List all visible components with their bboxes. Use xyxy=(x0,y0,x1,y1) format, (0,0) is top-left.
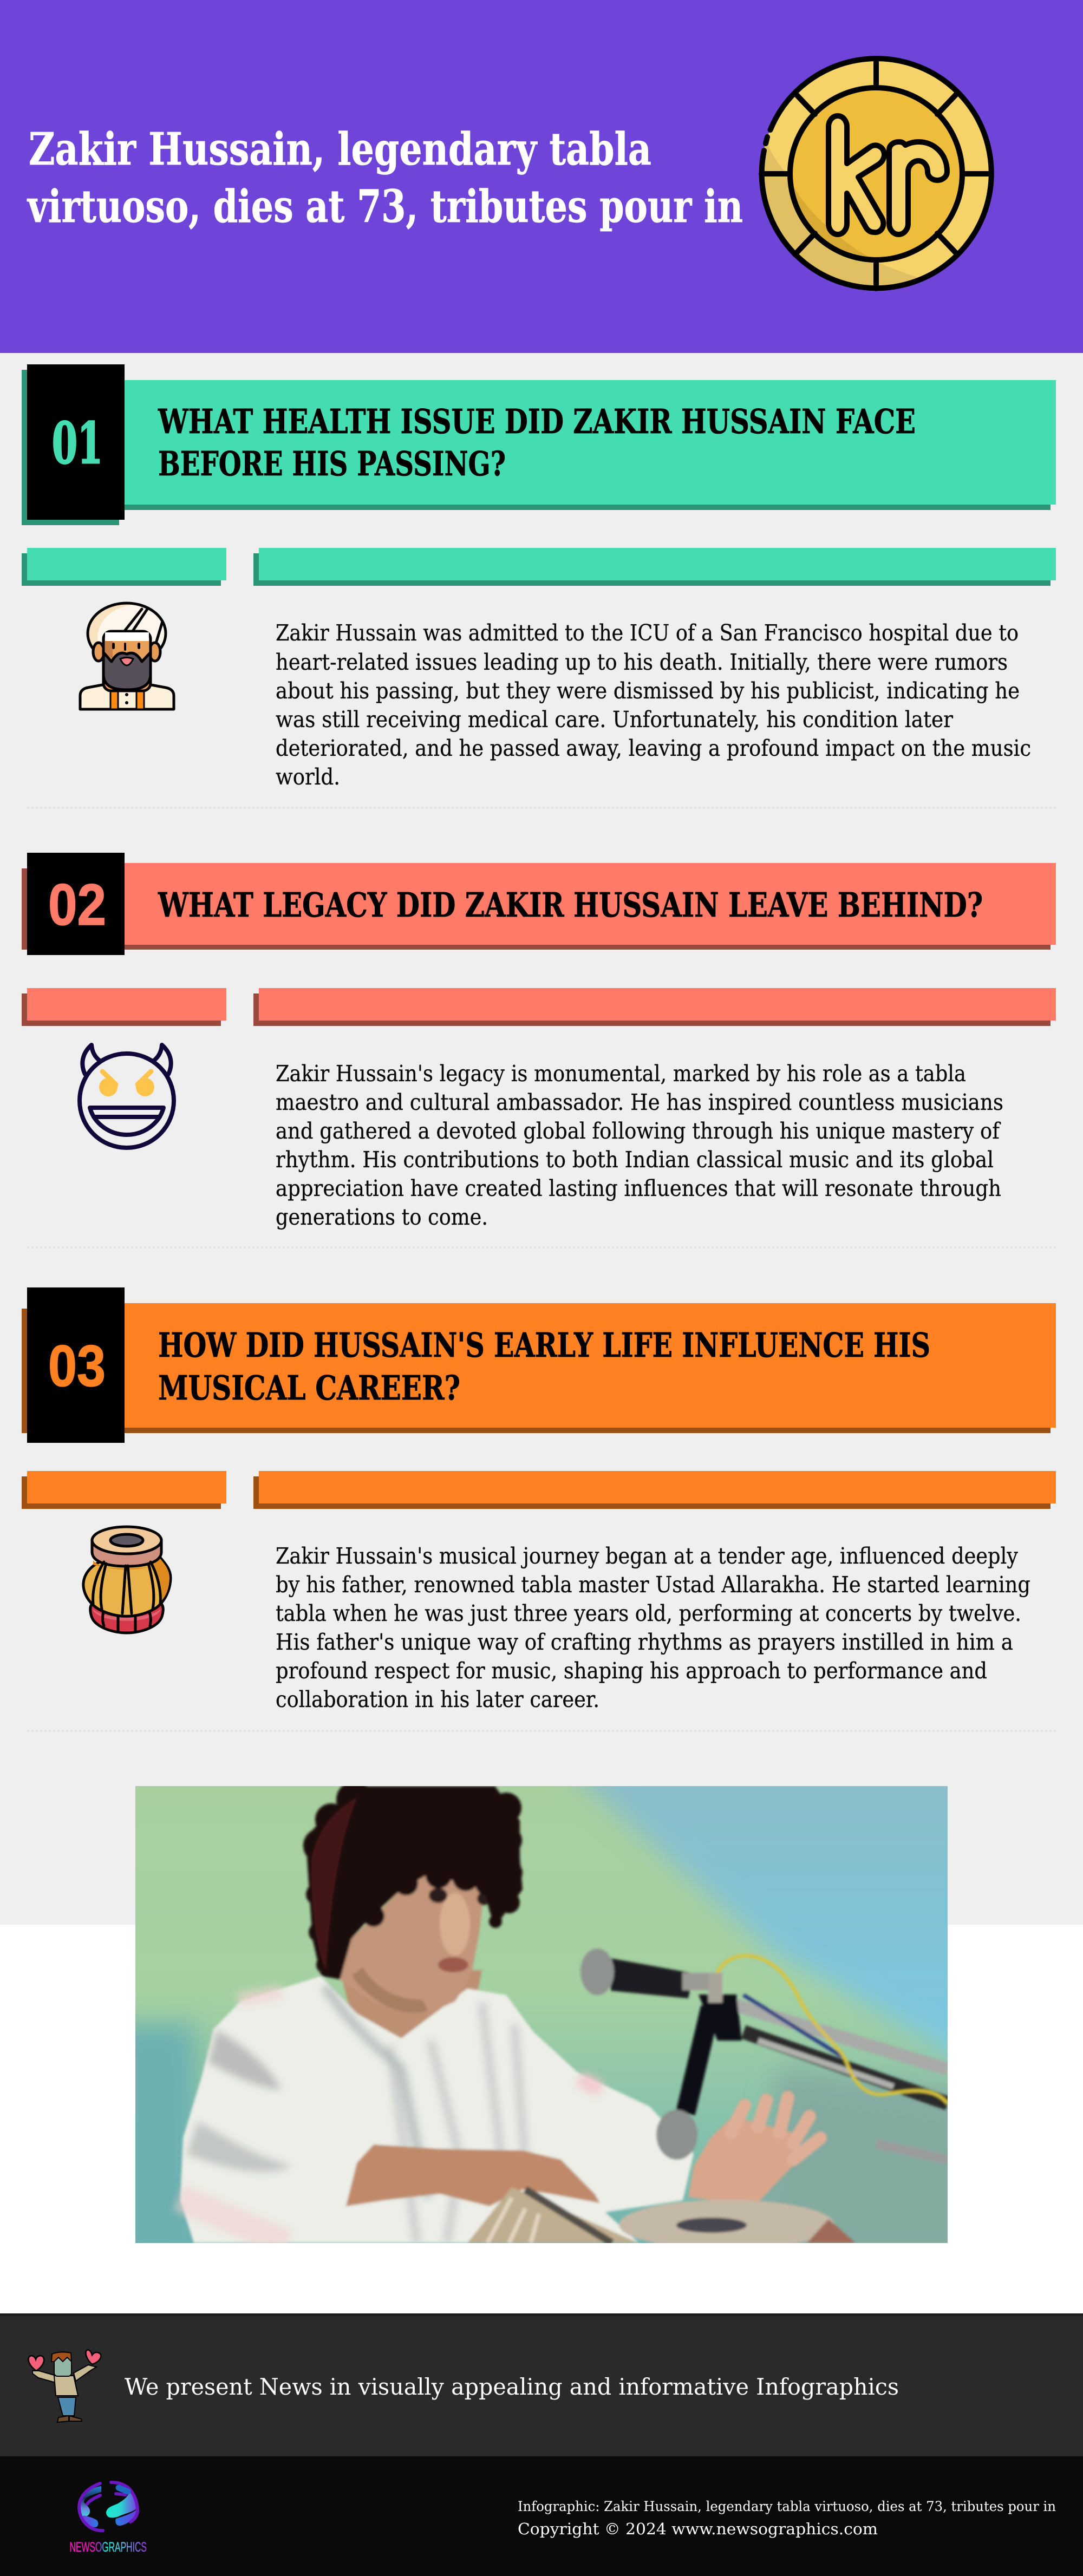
question 1 heading band: WHAT HEALTH ISSUE DID ZAKIR HUSSAIN FACE xyxy=(158,402,916,441)
answer text 3: collaboration in his later career. xyxy=(276,1686,599,1712)
answer text 2: appreciation have created lasting influences that will resonate through xyxy=(276,1175,1001,1201)
question 3 heading band xyxy=(22,1287,1056,1443)
answer text 3: tabla when he was just three years old, performing at concerts by twelve. xyxy=(276,1600,1021,1626)
panel: question 2 xyxy=(22,853,1056,1247)
answer text 3: profound respect for music, shaping his approach to performance and xyxy=(276,1658,987,1684)
hair xyxy=(307,1786,523,1979)
answer text 1: heart-related issues leading up to his death. Initially, there were rumors xyxy=(276,649,1008,675)
answer text 1: about his passing, but they were dismissed by his publicist, indicating he xyxy=(276,678,1020,704)
copyright text: Copyright © 2024 www.newsographics.com xyxy=(518,2520,878,2538)
icon: devil face xyxy=(80,1045,174,1148)
question 2 heading band: 02 xyxy=(48,872,106,937)
header banner xyxy=(0,0,1083,353)
answer text 3: His father's unique way of crafting rhythms as prayers instilled in him a xyxy=(276,1629,1013,1655)
bars under heading xyxy=(22,1471,1056,1509)
answer text 3 xyxy=(276,1543,1030,1712)
icon: kr coin xyxy=(747,58,991,303)
question 2 heading band xyxy=(22,853,1056,955)
question 1 heading band: 01 xyxy=(52,410,103,476)
title: Zakir Hussain, legendary tabla xyxy=(29,123,651,175)
panel: question 1 xyxy=(22,364,1056,808)
tabla drums xyxy=(619,2200,834,2250)
question 1 heading band: BEFORE HIS PASSING? xyxy=(158,444,506,483)
question 3 heading band: 03 xyxy=(48,1333,106,1398)
footer strip: tagline: We present News in visually appealing and informative Infographics xyxy=(125,2374,899,2400)
question 1 heading band xyxy=(22,364,1056,525)
microphone one xyxy=(611,1958,694,1998)
answer text 1: world. xyxy=(276,764,340,790)
title xyxy=(27,123,743,233)
answer text 1: Zakir Hussain was admitted to the ICU of a San Francisco hospital due to xyxy=(276,620,1019,646)
copyright text: Infographic: Zakir Hussain, legendary tabla virtuoso, dies at 73, tributes pour in xyxy=(518,2499,1056,2514)
photo: Zakir Hussain playing tabla xyxy=(135,1786,948,2243)
icon: man with turban xyxy=(80,603,180,709)
logo: Newsographics xyxy=(69,2482,147,2555)
microphone stand and microphone two xyxy=(686,2008,710,2113)
answer text 3: Zakir Hussain's musical journey began at a tender age, influenced deeply xyxy=(276,1543,1019,1569)
page background xyxy=(0,0,1083,1925)
answer text 1: was still receiving medical care. Unfortunately, his condition later xyxy=(276,707,953,733)
bars under heading xyxy=(22,988,1056,1026)
copyright text xyxy=(518,2499,1056,2538)
footer strip: tagline xyxy=(0,2313,1083,2456)
answer text 2: generations to come. xyxy=(276,1204,488,1230)
panel: question 3 xyxy=(22,1287,1056,1731)
icon: mascot with hearts xyxy=(29,2350,101,2422)
answer text 2: Zakir Hussain's legacy is monumental, marked by his role as a tabla xyxy=(276,1061,966,1087)
neck behind kurta xyxy=(338,1969,483,2039)
answer text 2 xyxy=(276,1061,1003,1230)
title: virtuoso, dies at 73, tributes pour in xyxy=(27,181,743,233)
hands xyxy=(346,2145,600,2206)
footer: logo and copyright xyxy=(0,2456,1083,2576)
face xyxy=(340,1874,484,2013)
answer text 1 xyxy=(276,620,1031,790)
kurta xyxy=(180,1976,694,2243)
logo: Newsographics: NEWSOGRAPHICS xyxy=(69,2540,147,2555)
answer text 2: maestro and cultural ambassador. He has inspired countless musicians xyxy=(276,1089,1003,1115)
stands and cables xyxy=(733,2004,948,2069)
icon: tabla drum xyxy=(83,1527,171,1633)
answer text 2: and gathered a devoted global following through his unique mastery of xyxy=(276,1118,1001,1144)
bars under heading xyxy=(22,548,1056,586)
question 3 heading band: MUSICAL CAREER? xyxy=(158,1368,460,1408)
answer text 2: rhythm. His contributions to both Indian classical music and its global xyxy=(276,1147,994,1173)
